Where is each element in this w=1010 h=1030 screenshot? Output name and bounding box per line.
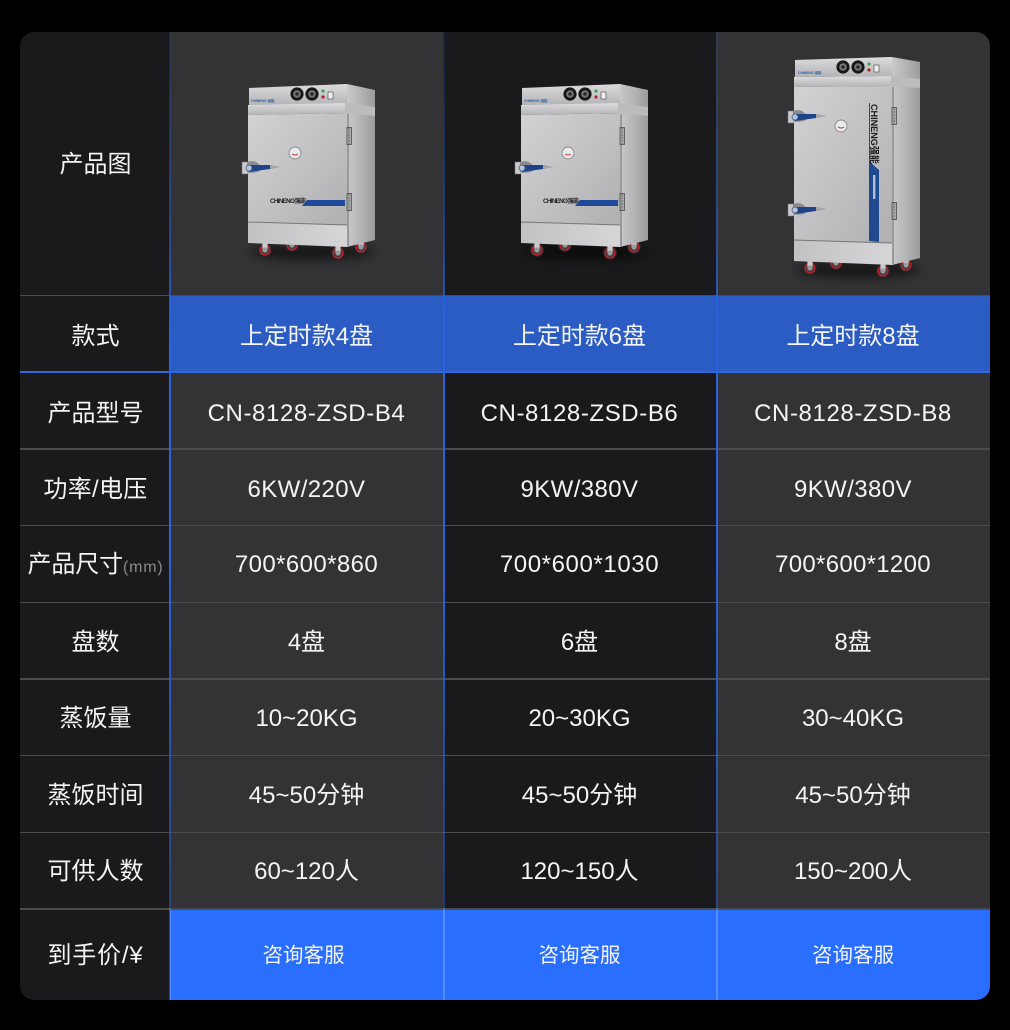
value: price 6 tray: 咨询客服	[538, 944, 620, 967]
row: power and voltage	[43, 476, 912, 503]
value: price 4 tray: 咨询客服	[262, 944, 344, 967]
value: trays 4: 4盘	[288, 629, 325, 656]
row: tray count	[72, 629, 872, 656]
value: capacity 6 tray: 20~30KG	[528, 705, 631, 732]
value: style 8 tray: 上定时款8盘	[786, 323, 920, 350]
value: capacity 4 tray: 10~20KG	[255, 705, 358, 732]
label: tray count: 盘数	[72, 629, 120, 656]
row: price	[47, 942, 894, 969]
row: servings	[48, 858, 912, 885]
value: time 6 tray: 45~50分钟	[522, 782, 637, 809]
label: power and voltage: 功率/电压	[43, 476, 148, 503]
product image: 4 tray steamer: CHINENG 强能	[251, 98, 275, 103]
product image: 8 tray steamer	[788, 57, 920, 278]
label: steaming time: 蒸饭时间	[48, 782, 144, 809]
row: steaming time	[48, 782, 911, 809]
value: price 8 tray: 咨询客服	[812, 944, 894, 967]
value: power 8 tray: 9KW/380V	[794, 476, 912, 503]
product image: 6 tray steamer: CHINENG 强能	[524, 98, 548, 103]
value: time 4 tray: 45~50分钟	[249, 782, 364, 809]
value: trays 6: 6盘	[561, 629, 598, 656]
column: model 8 tray background	[716, 32, 990, 1000]
value: power 6 tray: 9KW/380V	[521, 476, 638, 503]
value: style 4 tray: 上定时款4盘	[240, 323, 373, 350]
product image: 8 tray steamer: CHINENG强能	[868, 104, 880, 164]
style row highlight	[170, 296, 990, 372]
label: price: 到手价/¥	[47, 942, 144, 969]
value: power 4 tray: 6KW/220V	[248, 476, 365, 503]
row: dimensions	[27, 551, 931, 578]
price row highlight	[170, 909, 990, 1000]
column: model 4 tray background	[170, 32, 443, 1000]
label: servings: 可供人数	[48, 858, 144, 885]
value: trays 8: 8盘	[834, 629, 872, 656]
value: dimensions 4 tray: 700*600*860	[235, 551, 378, 578]
heading: product image row: 产品图	[60, 151, 132, 178]
value: dimensions 8 tray: 700*600*1200	[775, 551, 931, 578]
value: time 8 tray: 45~50分钟	[795, 782, 911, 809]
value: servings 6 tray: 120~150人	[520, 858, 639, 885]
value: servings 4 tray: 60~120人	[254, 858, 359, 885]
label: dimensions: 产品尺寸(mm)	[27, 551, 164, 578]
row: style	[72, 323, 920, 350]
row: model number	[48, 400, 952, 427]
product image: 6 tray steamer	[515, 84, 648, 260]
value: dimensions 6 tray: 700*600*1030	[500, 551, 659, 578]
column: model 6 tray background	[443, 32, 716, 1000]
value: capacity 8 tray: 30~40KG	[802, 705, 904, 732]
product image: 6 tray steamer: CHINENG强能	[543, 197, 580, 205]
value: servings 8 tray: 150~200人	[794, 858, 912, 885]
label: rice capacity: 蒸饭量	[60, 705, 132, 732]
product image: 4 tray steamer	[242, 84, 375, 260]
product image: 8 tray steamer: CHINENG 强能	[798, 70, 822, 75]
value: model 4 tray: CN-8128-ZSD-B4	[208, 400, 405, 427]
row: rice capacity	[60, 705, 904, 732]
value: model 8 tray: CN-8128-ZSD-B8	[754, 400, 952, 427]
value: style 6 tray: 上定时款6盘	[513, 323, 646, 350]
label: model number: 产品型号	[48, 400, 144, 427]
label: style: 款式	[72, 323, 120, 350]
product image: 4 tray steamer: CHINENG强能	[270, 197, 307, 205]
value: model 6 tray: CN-8128-ZSD-B6	[481, 400, 678, 427]
